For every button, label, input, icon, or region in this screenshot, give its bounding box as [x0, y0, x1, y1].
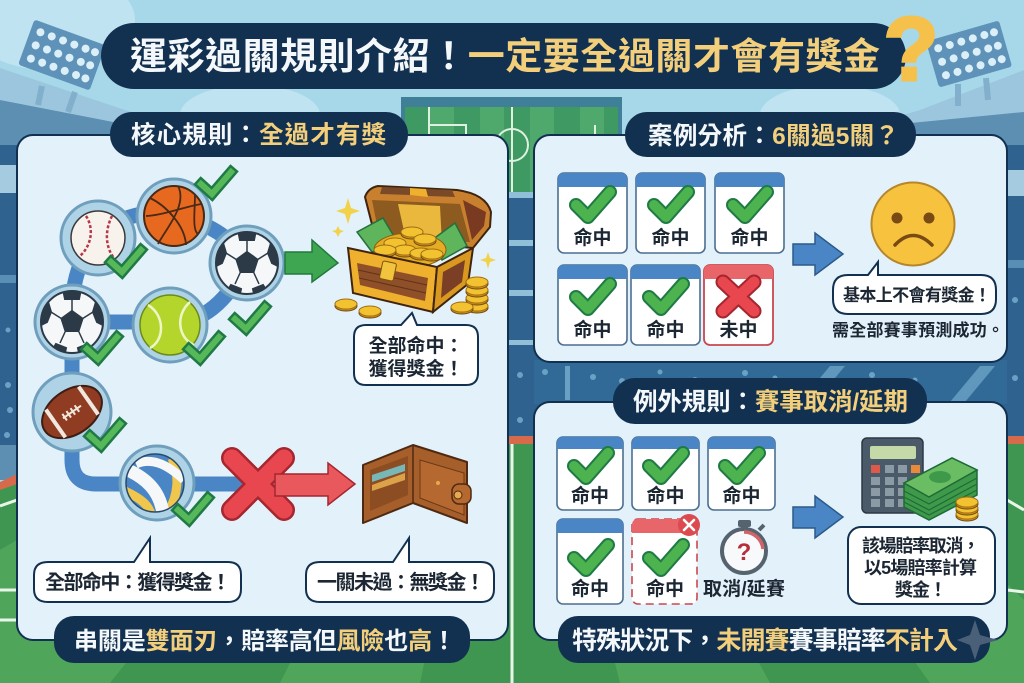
panel: exception rule	[534, 378, 1007, 640]
arrow: red to wallet	[275, 463, 355, 505]
ticket card B: 命中	[646, 484, 685, 507]
callout: one miss no prize	[306, 538, 494, 602]
callout: no prize: 基本上不會有獎金！	[843, 285, 991, 305]
heading: exception rule: 例外規則：賽事取消/延期	[633, 387, 908, 416]
arrow: blue to result	[793, 233, 843, 275]
banner: special situations: 特殊狀況下，未開賽賽事賠率不計入	[572, 626, 958, 655]
ticket card E: cancelled	[632, 514, 700, 604]
text: requirement note: 需全部賽事預測成功。	[832, 320, 1004, 340]
heading: exception rule	[613, 378, 927, 424]
icon: money stack and coins	[904, 458, 978, 521]
icon: soccer ball top	[210, 226, 284, 329]
banner: double-edged: 串關是雙面刃，賠率高但風險也高！	[74, 627, 456, 655]
icon: soccer ball left	[35, 285, 117, 359]
callout: recalculated odds: 獎金！	[895, 579, 947, 600]
ticket card 2	[636, 173, 705, 253]
callout: recalculated odds: 該場賠率取消，	[862, 535, 980, 556]
callout: all hit chest	[354, 313, 478, 385]
arrow: blue to calculation	[793, 496, 843, 538]
icon: tennis ball	[133, 288, 219, 362]
icon: stopwatch	[722, 520, 766, 573]
icon: question mark: ?	[884, 0, 938, 100]
icon: empty wallet	[363, 445, 471, 523]
ticket card 6: missed: 未中	[719, 319, 758, 341]
callout: all hit wins	[34, 538, 241, 602]
chain path linking balls	[72, 213, 247, 484]
callout: one miss no prize: 一關未過：無獎金！	[317, 570, 485, 594]
arrow: green to treasure	[285, 240, 338, 282]
background: center pitch	[401, 97, 622, 192]
callout: recalculated odds: 以5場賠率計算	[864, 557, 977, 578]
icon: basketball	[137, 172, 231, 253]
title banner: 運彩過關規則介紹！一定要全過關才會有獎金	[130, 36, 880, 77]
heading: core rule: 核心規則：全過才有獎	[131, 121, 386, 149]
banner: double-edged	[54, 616, 470, 663]
heading: case study	[625, 112, 916, 157]
ticket card 4	[558, 265, 627, 345]
ticket card C	[708, 437, 775, 510]
ticket card A: 命中	[571, 484, 609, 507]
ticket card 2: 命中	[651, 226, 690, 249]
panel: case study	[534, 112, 1007, 362]
icon: sad face	[872, 182, 954, 266]
panel: core rule	[17, 112, 508, 640]
ticket card 4: 命中	[573, 318, 612, 341]
ticket card C: 命中	[722, 484, 761, 507]
callout: all hit chest: 全部命中：	[368, 334, 464, 357]
ticket card 1	[558, 173, 627, 253]
heading: core rule	[110, 112, 408, 157]
icon: right floodlight	[926, 20, 1012, 106]
title banner	[101, 23, 906, 89]
icon: big red cross	[232, 458, 284, 510]
ticket card A	[557, 437, 623, 510]
icon: stopwatch: ?	[737, 539, 751, 566]
ticket card 5	[631, 265, 700, 345]
ticket card D: 命中	[571, 577, 609, 600]
icon: calculator	[862, 438, 923, 513]
callout: all hit chest: 獲得獎金！	[368, 357, 464, 380]
callout: no prize	[833, 262, 996, 314]
callout: all hit wins: 全部命中：獲得獎金！	[45, 570, 231, 594]
icon: sparkle	[957, 620, 998, 660]
ticket card 5: 命中	[646, 318, 685, 341]
icon: treasure chest	[332, 186, 496, 318]
icon: left floodlight	[18, 19, 106, 112]
ticket card E: cancelled: 命中	[646, 577, 684, 600]
ticket card 3	[715, 173, 784, 253]
ticket card B	[632, 437, 699, 510]
ticket card D	[557, 519, 623, 604]
ticket card 3: 命中	[730, 226, 769, 249]
callout: recalculated odds	[848, 527, 995, 604]
banner: special situations	[558, 616, 990, 663]
icon: volleyball	[120, 446, 208, 520]
label: cancelled or postponed: 取消/延賽	[703, 577, 785, 600]
ticket card 6: missed	[704, 265, 773, 345]
icon: american football	[32, 373, 120, 451]
icon: baseball	[61, 201, 141, 275]
ticket card 1: 命中	[573, 226, 612, 249]
heading: case study: 案例分析：6關過5關？	[648, 122, 899, 150]
